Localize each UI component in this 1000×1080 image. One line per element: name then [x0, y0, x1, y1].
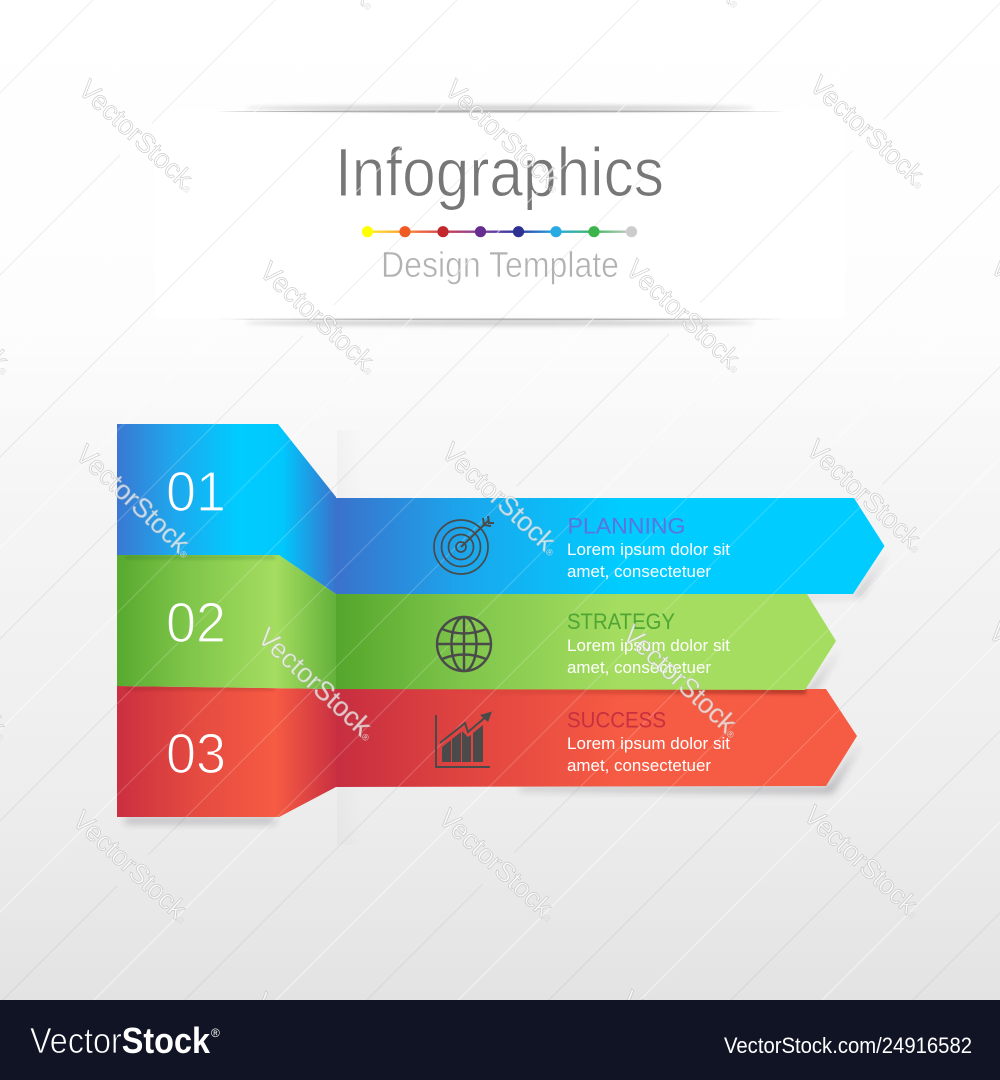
- subtitle: Design Template: [381, 244, 619, 285]
- watermark stamps: VectorStock®: [804, 70, 934, 194]
- text block: strategy: STRATEGY: [567, 609, 675, 634]
- text block: planning: [567, 514, 730, 581]
- icon: growth chart: [436, 712, 492, 767]
- watermark stamps: VectorStock®: [439, 74, 569, 198]
- fold shading below ribbon: [337, 785, 363, 845]
- text block: success: SUCCESS: [567, 708, 666, 732]
- text block: success: amet, consectetuer: [567, 757, 712, 775]
- panel: title card: [155, 105, 845, 326]
- text block: planning: PLANNING: [568, 514, 686, 538]
- watermark stamps: VectorStock®: [617, 619, 747, 743]
- green arrow band: [336, 594, 836, 690]
- text block: strategy: Lorem ipsum dolor sit: [567, 637, 730, 655]
- watermark stamps: VectorStock®: [254, 256, 384, 380]
- tab numbers: [166, 460, 226, 786]
- green number tab: [117, 555, 336, 689]
- watermark stamps: VectorStock®: [798, 800, 928, 924]
- red number tab: [117, 686, 336, 817]
- footer logo: VectorStock: [30, 1020, 211, 1061]
- registered mark: ®: [211, 1026, 220, 1040]
- footer bar: [0, 1000, 1000, 1080]
- watermark stamps: VectorStock®: [70, 439, 200, 563]
- icon: target with arrow: [434, 516, 494, 574]
- watermark stamps: VectorStock®: [620, 254, 750, 378]
- icon: globe: [437, 617, 491, 671]
- watermark stamps: VectorStock®: [433, 803, 563, 927]
- text block: planning: Lorem ipsum dolor sit: [567, 541, 730, 559]
- text block: planning: amet, consectetuer: [567, 563, 712, 581]
- number 03: 03: [166, 722, 226, 786]
- panel: arrow shadows: [125, 552, 889, 823]
- shadow on green tab: [125, 556, 275, 559]
- text block: success: [567, 708, 730, 775]
- watermark stamps: VectorStock®: [67, 805, 197, 929]
- colored dot timeline: [362, 226, 637, 237]
- fold shading above ribbon: [337, 430, 363, 500]
- watermark stamps: VectorStock®: [436, 437, 566, 561]
- diagonal lines over ribbon: [117, 424, 887, 817]
- title: Infographics: [335, 134, 664, 211]
- watermark stamps: VectorStock®: [73, 74, 203, 198]
- red arrow band: [336, 689, 857, 787]
- shadow on red tab: [125, 687, 275, 690]
- blue arrow band: [336, 498, 884, 594]
- watermark stamps: VectorStock®: [252, 622, 382, 746]
- number 02: 02: [166, 591, 226, 655]
- text block: strategy: amet, consectetuer: [567, 659, 712, 677]
- text block: success: Lorem ipsum dolor sit: [567, 735, 730, 753]
- footer image id: VectorStock.com/24916582: [724, 1033, 972, 1058]
- watermark stamps: VectorStock®: [801, 434, 931, 558]
- text block: strategy: [567, 609, 730, 677]
- top shadow strip: [216, 105, 785, 112]
- bottom shadow strip: [216, 318, 785, 326]
- shadow on red band: [450, 689, 806, 694]
- panel: 01 planning: [117, 424, 884, 594]
- blue number tab: [117, 424, 336, 594]
- panel: 02 strategy: [117, 555, 836, 690]
- panel: 03 success: [117, 686, 857, 817]
- number 01: 01: [166, 460, 226, 524]
